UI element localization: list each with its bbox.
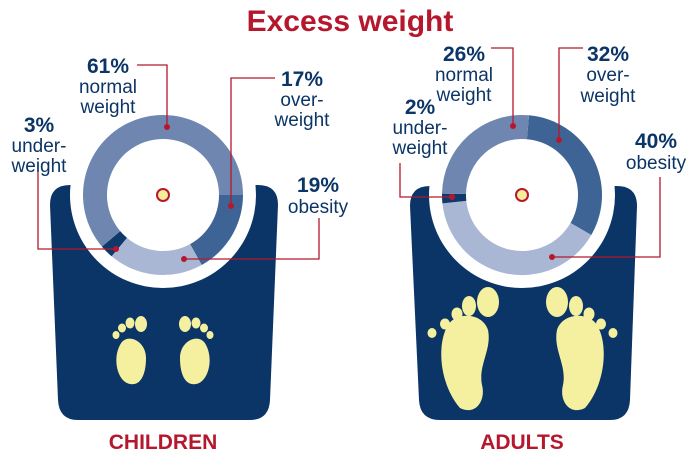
panel: adults scale	[410, 102, 637, 420]
labels: adults: under-	[393, 118, 447, 139]
labels: adults: weight	[580, 86, 636, 107]
scale body	[50, 185, 278, 420]
labels: adults: 26%	[443, 43, 485, 66]
labels: adults: 2%	[405, 96, 435, 119]
labels: children	[11, 55, 349, 218]
labels: adults: 40%	[635, 130, 677, 153]
labels: children: 17%	[281, 68, 323, 91]
labels: children: over-	[280, 90, 324, 111]
labels: children: 3%	[24, 114, 54, 137]
donut chart: adults	[442, 115, 602, 275]
caption: adults: ADULTS	[480, 431, 564, 454]
labels: children: weight	[11, 156, 67, 177]
labels: adults	[392, 43, 687, 174]
labels: adults: weight	[436, 85, 492, 106]
labels: adults: weight	[392, 138, 448, 159]
labels: children: normal	[79, 77, 137, 98]
labels: children: weight	[274, 110, 330, 131]
labels: children: obesity	[288, 197, 349, 218]
labels: adults: obesity	[626, 153, 687, 174]
labels: adults: normal	[435, 65, 493, 86]
feet: children	[112, 316, 214, 384]
labels: children: under-	[12, 136, 66, 157]
title: Excess weight	[247, 5, 453, 38]
labels: children: 61%	[87, 55, 129, 78]
donut chart: children	[83, 115, 243, 275]
labels: children: 19%	[297, 174, 339, 197]
caption: children: CHILDREN	[109, 431, 217, 454]
leader dots	[113, 123, 562, 262]
panel: children scale	[50, 102, 278, 420]
leader lines	[38, 48, 660, 259]
labels: adults: over-	[586, 65, 630, 86]
feet: adults	[428, 287, 618, 410]
labels: children: weight	[80, 97, 136, 118]
labels: adults: 32%	[587, 43, 629, 66]
